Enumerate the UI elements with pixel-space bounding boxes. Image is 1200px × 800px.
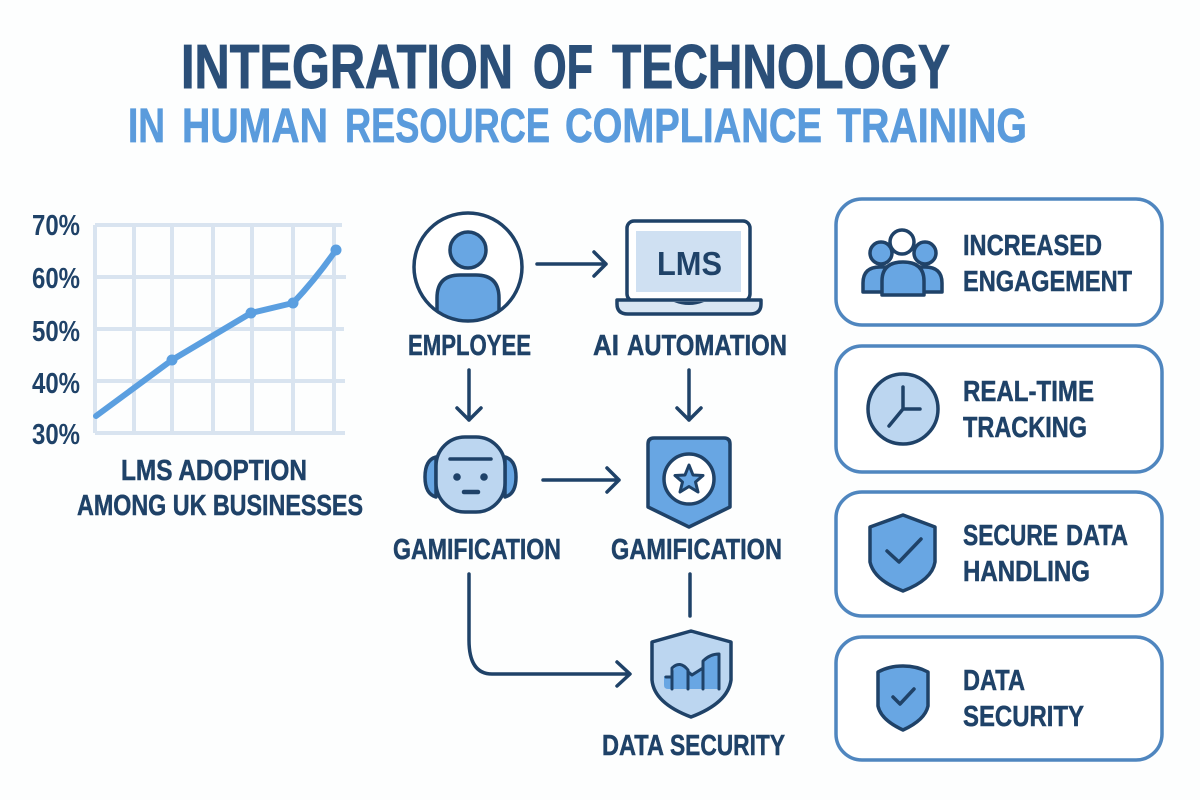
axis labels: 60% — [32, 263, 80, 295]
text: data security: SECURITY — [963, 701, 1084, 733]
panel: data security — [836, 637, 1162, 760]
icon: star badge — [648, 438, 730, 527]
arrow: employee down — [457, 370, 481, 420]
line chart: LMS adoption — [32, 210, 346, 451]
text: increased engagement: ENGAGEMENT — [963, 266, 1132, 298]
title: COMPLIANCE — [565, 100, 822, 153]
text: real-time tracking: TRACKING — [963, 412, 1087, 444]
label: data security — [602, 730, 785, 762]
arrow: gamification elbow to data security — [469, 574, 630, 686]
text: data security: DATA — [963, 665, 1025, 697]
axis labels: 30% — [32, 419, 80, 451]
icon: employee — [414, 213, 522, 325]
icon: people — [863, 230, 942, 295]
label: employee: EMPLOYEE — [408, 330, 531, 362]
title: INTEGRATION — [181, 33, 513, 102]
icon: data security shield — [652, 631, 731, 717]
text: increased engagement: INCREASED — [963, 230, 1102, 262]
title: TRAINING — [837, 100, 1027, 153]
title: OF — [533, 33, 593, 102]
icon: LMS laptop: LMS — [657, 245, 722, 282]
title — [128, 33, 1027, 153]
axis labels — [32, 210, 80, 451]
arrow: employee to LMS — [537, 252, 606, 276]
icon: clock — [868, 374, 938, 444]
panel: real-time tracking — [836, 346, 1162, 472]
chart caption — [77, 455, 363, 522]
label: gamification left: GAMIFICATION — [393, 534, 561, 566]
title: TECHNOLOGY — [612, 33, 950, 102]
text: secure data handling: SECURE — [963, 520, 1058, 552]
icon: robot — [425, 437, 516, 512]
label: data security: DATA — [602, 730, 664, 762]
text: secure data handling — [963, 520, 1128, 588]
axis labels: 40% — [32, 368, 80, 400]
axis labels: 70% — [32, 210, 80, 242]
panel: secure data handling — [836, 492, 1162, 616]
text: real-time tracking — [963, 376, 1094, 444]
text: secure data handling: HANDLING — [963, 556, 1090, 588]
axis labels: 50% — [32, 316, 80, 348]
icon: shield check small — [878, 666, 928, 730]
title: RESOURCE — [345, 100, 550, 153]
label: AI automation: AI — [593, 330, 619, 362]
chart caption: AMONG UK BUSINESSES — [77, 490, 363, 522]
label: AI automation: AUTOMATION — [627, 330, 787, 362]
icon: shield check large — [870, 515, 935, 591]
text: real-time tracking: REAL-TIME — [963, 376, 1094, 408]
arrow: automation down — [677, 370, 701, 420]
arrow: robot to badge — [543, 468, 619, 492]
text: increased engagement — [963, 230, 1132, 298]
text: data security — [963, 665, 1084, 733]
connector: gamification to data security — [688, 574, 692, 616]
icon: LMS laptop — [617, 221, 761, 314]
title: IN — [128, 100, 165, 153]
data line — [96, 244, 342, 416]
label: data security: SECURITY — [670, 730, 785, 762]
text: secure data handling: DATA — [1066, 520, 1128, 552]
panel: increased engagement — [836, 199, 1162, 325]
chart caption: LMS ADOPTION — [121, 455, 307, 487]
label: gamification right: GAMIFICATION — [611, 534, 782, 566]
title: HUMAN — [182, 100, 328, 153]
